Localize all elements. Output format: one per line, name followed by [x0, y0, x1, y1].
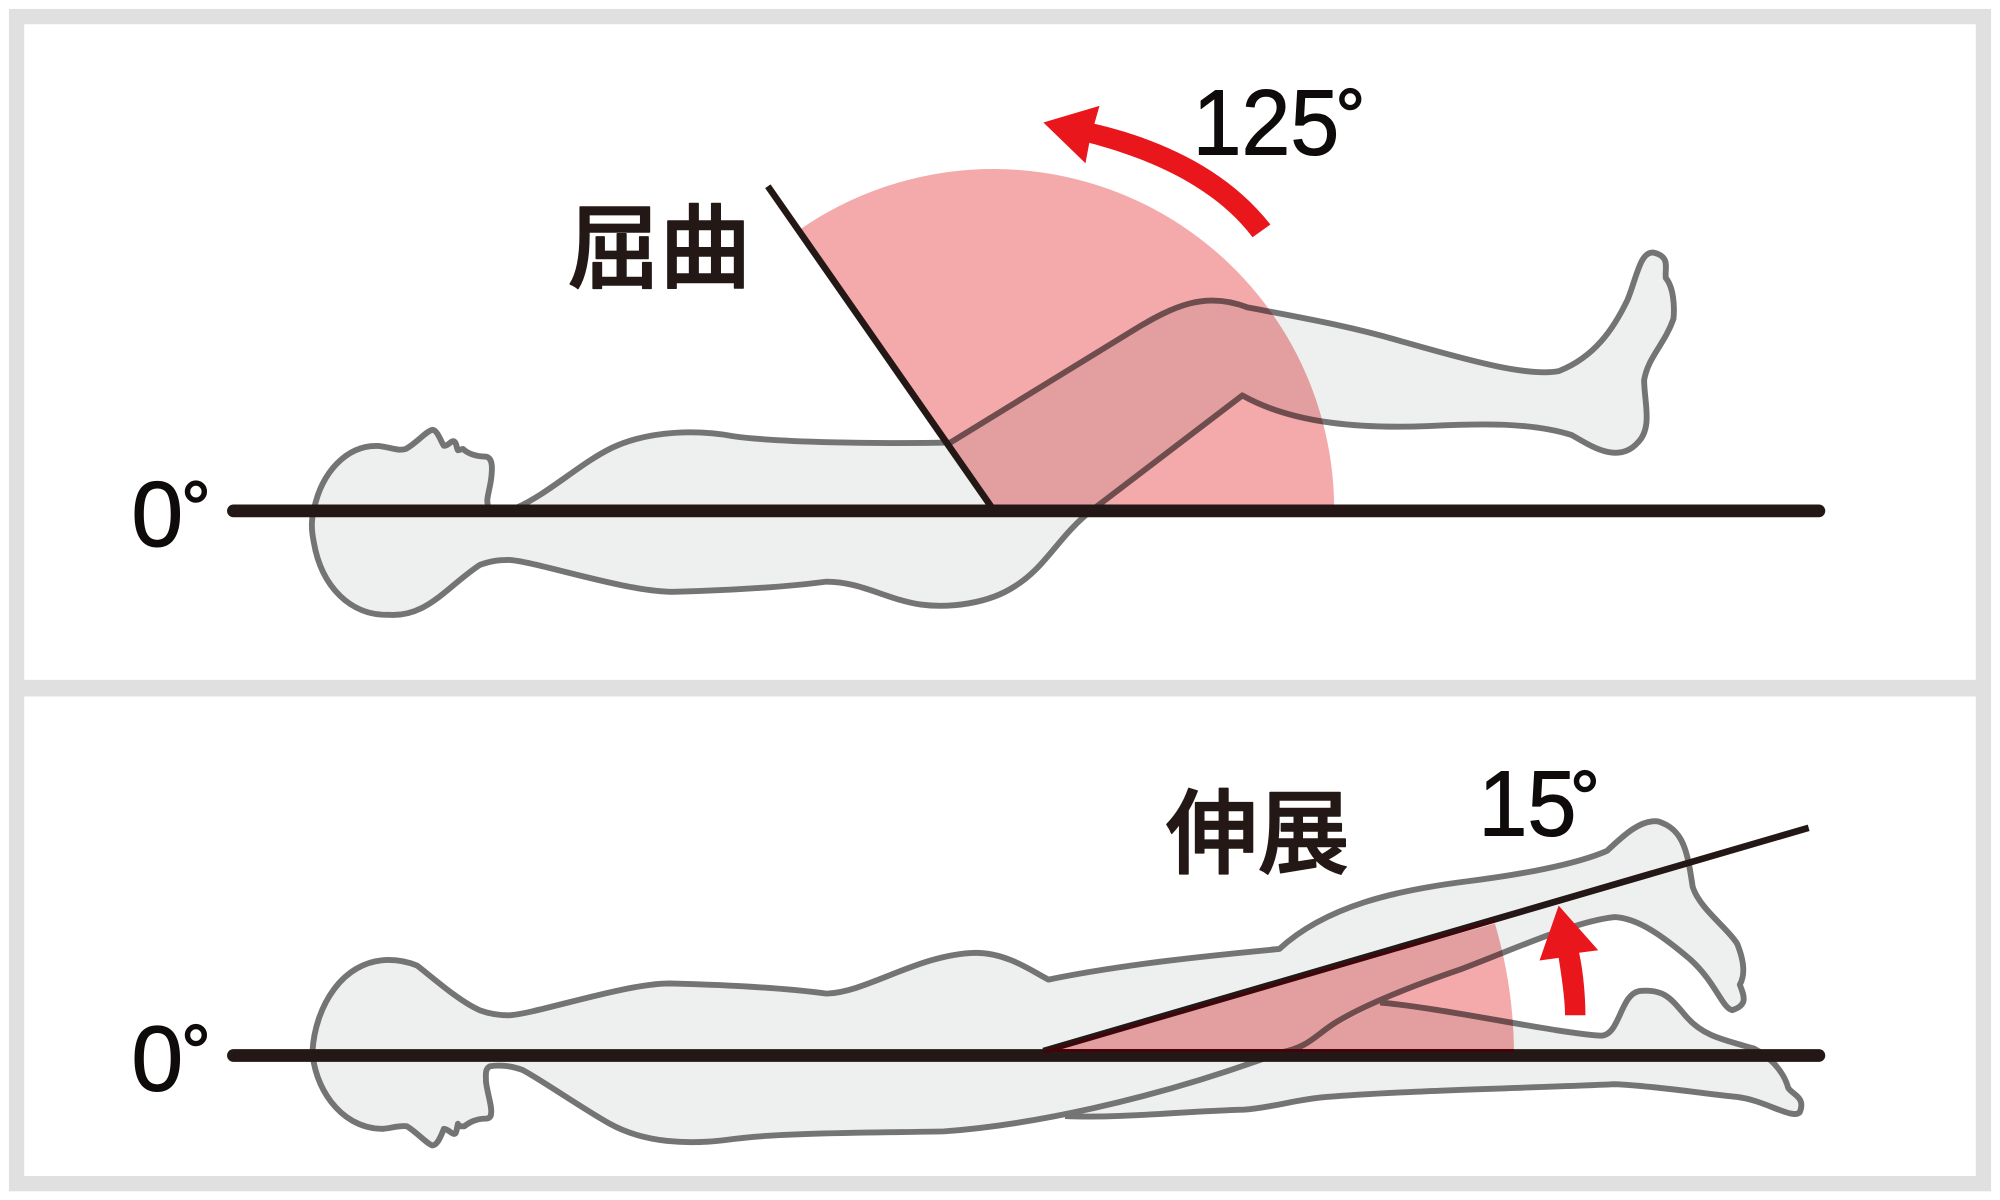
label: 0 degrees — [131, 462, 211, 566]
label: 0 degrees: ° — [181, 466, 211, 549]
panel: flexion — [131, 70, 1819, 615]
label: flexion: 屈曲 — [568, 199, 751, 301]
arrow: flexion direction — [1043, 106, 1270, 237]
extension limit line — [1043, 828, 1809, 1051]
zero degree baseline — [233, 1050, 1819, 1060]
label: 15 degrees: ° — [1570, 756, 1600, 839]
flexion limit line — [768, 186, 994, 510]
extension angle sector — [1043, 923, 1514, 1050]
label: 125 degrees: 125 — [1193, 70, 1339, 174]
panel: extension — [131, 751, 1819, 1145]
label: 0 degrees: ° — [181, 1010, 211, 1093]
figure: far leg — [1065, 991, 1801, 1117]
label: 15 degrees: 15 — [1478, 751, 1577, 855]
label: extension: 伸展 — [1166, 784, 1349, 886]
label: 125 degrees: ° — [1335, 73, 1365, 156]
arrow: extension direction — [1540, 906, 1598, 1015]
sector edge tint — [1043, 921, 1514, 1052]
zero degree baseline — [233, 506, 1819, 516]
label: 0 degrees: 0 — [131, 1007, 183, 1111]
figure: lying body with raised leg — [312, 821, 1744, 1145]
label: 0 degrees — [131, 1007, 211, 1111]
label: 0 degrees: 0 — [131, 462, 183, 566]
flexion angle sector — [800, 169, 1334, 510]
figure: lying body with bent knee — [312, 253, 1674, 615]
